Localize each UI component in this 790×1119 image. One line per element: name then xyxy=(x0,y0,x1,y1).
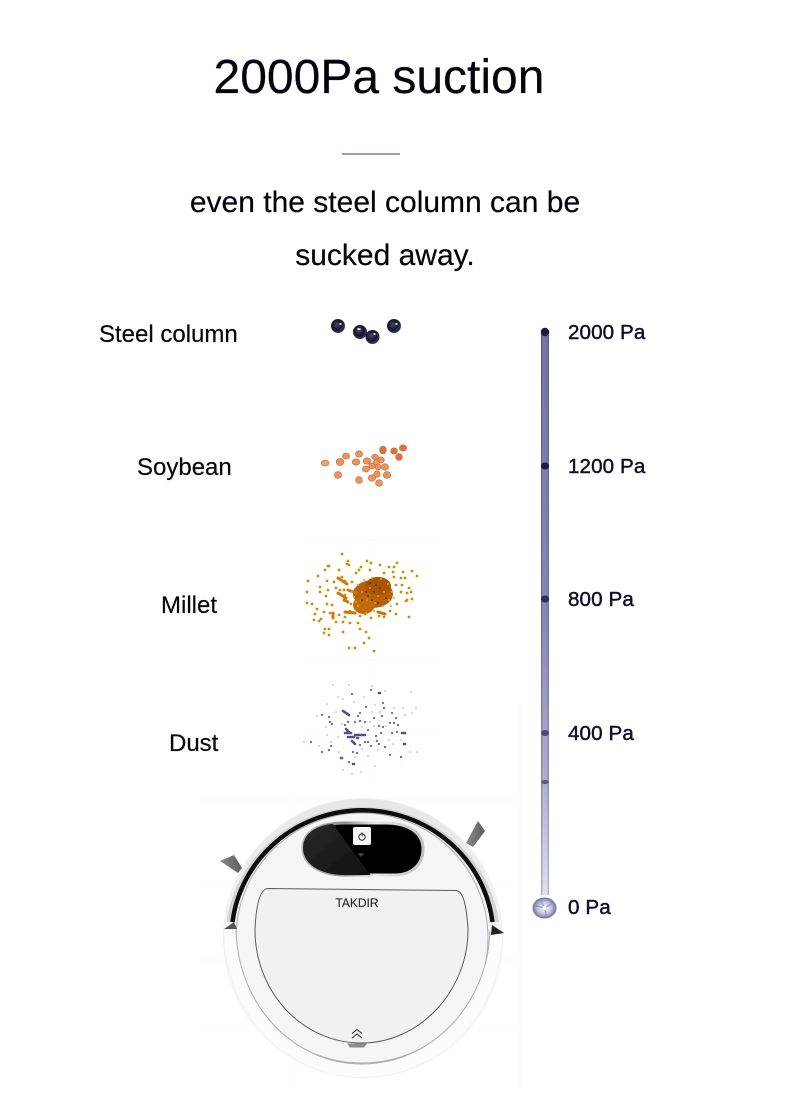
lid latch xyxy=(347,1044,367,1048)
subtitle xyxy=(190,186,580,272)
label: 1200 Pa: 1200 Pa xyxy=(568,455,645,478)
knob: 0 Pa xyxy=(532,898,556,918)
lower rim white xyxy=(224,930,502,1077)
label: dust: Dust xyxy=(169,730,218,757)
subtitle: even the steel column can be xyxy=(190,186,580,219)
label: steel column: Steel column xyxy=(99,321,238,348)
robot vacuum xyxy=(220,798,504,1078)
display panel xyxy=(300,820,423,877)
label: 800 Pa: 800 Pa xyxy=(568,588,634,611)
label: 2000 Pa: 2000 Pa xyxy=(568,321,645,344)
dustbin lid xyxy=(255,888,468,1043)
icon: right side brush xyxy=(466,821,485,847)
label: 0 Pa: 0 Pa xyxy=(568,896,611,919)
label: soybean: Soybean xyxy=(137,454,232,481)
icon: left side brush xyxy=(220,855,242,873)
icon: power button xyxy=(353,827,371,845)
outer body xyxy=(224,798,502,1078)
icon: chevrons xyxy=(352,1030,362,1038)
brand: TAKDIR: TAKDIR xyxy=(335,896,379,910)
subtitle: sucked away. xyxy=(295,239,475,272)
inner top plate xyxy=(236,813,488,1063)
icon: steel balls xyxy=(331,319,401,344)
label: 400 Pa: 400 Pa xyxy=(568,722,634,745)
icon: millet pile xyxy=(307,554,417,651)
label: millet: Millet xyxy=(161,592,217,619)
title: 2000Pa suction xyxy=(214,51,544,104)
bumper corners xyxy=(224,922,237,929)
suction scale bar xyxy=(532,328,556,918)
divider xyxy=(342,153,400,154)
tick: 2000 Pa xyxy=(541,328,549,336)
icon: soybeans xyxy=(321,445,407,486)
tick: 800 Pa xyxy=(541,596,549,602)
icon: dust scatter xyxy=(304,685,417,774)
black bumper arc xyxy=(228,809,497,922)
tick: 1200 Pa xyxy=(541,462,549,470)
tick: 400 Pa xyxy=(541,730,549,736)
